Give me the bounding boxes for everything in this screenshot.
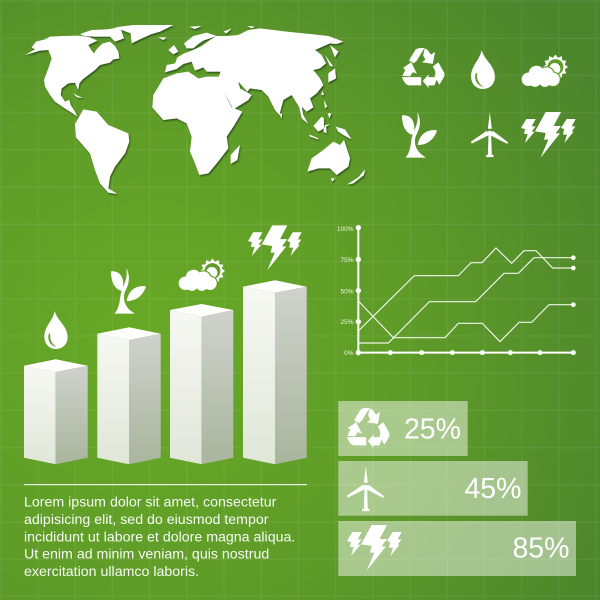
percentage bar: recycling 25% (338, 401, 468, 456)
Borneo (313, 117, 324, 132)
body text: adipisicing elit, sed do eiusmod tempor (24, 512, 269, 528)
icon: sprout above column 2 (111, 268, 146, 314)
body text: Ut enim ad minim veniam, quis nostrud (24, 547, 269, 563)
Tasmania (331, 178, 335, 182)
axis labels: 0% (344, 350, 354, 357)
Kamchatka (330, 45, 338, 57)
South America (75, 109, 129, 194)
icon: bolts above column 4 (248, 225, 302, 270)
North America (25, 36, 119, 117)
axis labels (337, 226, 354, 357)
line chart (337, 225, 576, 357)
Iceland (158, 37, 167, 40)
Greenland (115, 25, 173, 43)
percentage bar: energy 85%: 85% (512, 533, 570, 565)
Sri Lanka (279, 113, 282, 119)
column 4 (243, 280, 307, 464)
icon: cloud and sun (522, 54, 568, 87)
percentage bar: wind 45% (338, 461, 528, 516)
Japan (328, 68, 336, 82)
New Guinea (336, 127, 352, 139)
column 3 (170, 304, 233, 464)
bar chart: 3D columns (24, 280, 307, 464)
icon: recycle (402, 48, 444, 88)
world map (25, 25, 365, 194)
axes (356, 225, 576, 355)
percentage bar: wind 45%: 45% (464, 473, 522, 505)
body text: exercitation ullamco laboris. (24, 564, 199, 580)
Sulawesi (323, 124, 330, 133)
axis labels: 25% (340, 319, 354, 326)
Sakhalin (325, 55, 333, 67)
Taiwan (321, 91, 324, 95)
divider rule (24, 484, 307, 485)
Arctic specks (189, 26, 202, 29)
UK (168, 45, 178, 54)
icon: sprout (402, 112, 437, 158)
Australia (307, 140, 350, 175)
icon: water drop (471, 50, 495, 89)
Eurasia (165, 28, 343, 124)
Scandinavia (184, 33, 217, 48)
axis labels: 50% (340, 288, 354, 296)
percentage bar: recycling 25%: 25% (404, 413, 461, 445)
Africa (152, 72, 242, 175)
axis labels: 75% (340, 257, 354, 264)
icon: drop above column 1 (44, 311, 68, 349)
New Zealand (347, 169, 365, 184)
Cuba (73, 93, 83, 98)
Philippines (324, 100, 327, 108)
data lines (358, 248, 576, 343)
column 2 (97, 327, 161, 464)
Java (309, 134, 318, 139)
icon: cloud above column 3 (179, 258, 225, 291)
column 1 (24, 359, 88, 464)
Madagascar (231, 145, 240, 164)
icon: lightning bolts (521, 112, 576, 158)
body text: incididunt ut labore et dolore magna aliqua. (24, 529, 295, 545)
Arctic islands (80, 27, 124, 42)
icon: wind turbine (471, 112, 508, 157)
axis labels: 100% (337, 226, 354, 233)
percentage bar: energy 85% (338, 521, 576, 576)
body text: Lorem ipsum dolor sit amet, consectetur (24, 495, 277, 511)
